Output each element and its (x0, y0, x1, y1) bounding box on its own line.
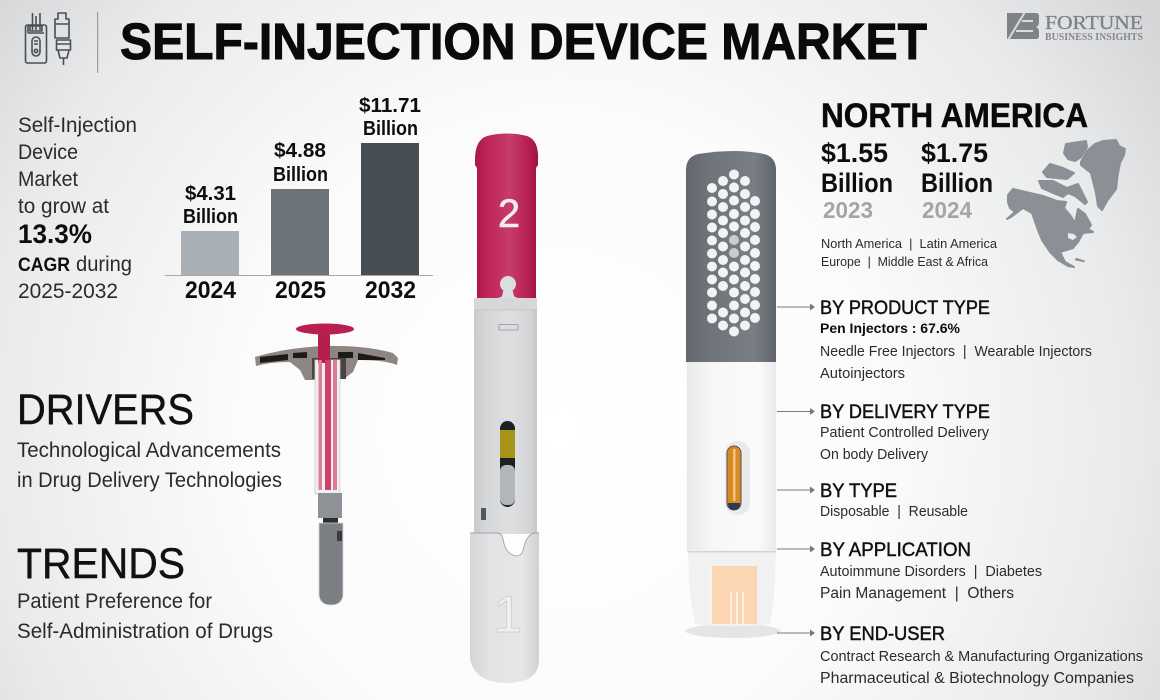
segment: by type: Disposable | Reusable (820, 504, 968, 520)
text block: trends (17, 540, 273, 643)
logo: Fortune Business Insights: BUSINESS INSIGHTS (1045, 32, 1143, 43)
segment: by end-user: Contract Research & Manufacturing Organizations (820, 649, 1143, 665)
bar chart: market size (165, 95, 433, 304)
text block: market growth summary: Market (18, 168, 78, 191)
text block: trends: Self-Administration of Drugs (17, 620, 273, 643)
stat: 2024 value: Billion (921, 168, 993, 198)
segment: by delivery type: On body Delivery (820, 447, 929, 463)
text block: market growth summary: Self-Injection (18, 114, 137, 137)
segment: by end-user: BY END-USER (820, 624, 945, 645)
bar: 2025 (271, 140, 329, 304)
segment: by application: BY APPLICATION (820, 540, 971, 561)
stat: 2024 value: $1.75 (921, 138, 988, 168)
text block: region list (821, 237, 997, 269)
illustration: red and grey autoinjector pen: 2 (498, 192, 520, 236)
arrow: delivery type (777, 408, 815, 415)
text block: market growth summary: CAGR (18, 255, 70, 276)
text block: region list: North America | Latin America (821, 237, 997, 251)
stat: 2024 value: 2024 (922, 197, 972, 223)
arrow: product type (777, 304, 815, 310)
stat: 2023 value: Billion (821, 168, 893, 198)
text block: market growth summary (18, 114, 137, 303)
segment: by delivery type (820, 402, 990, 463)
bar: 2024: $4.31 (185, 183, 236, 205)
segment: by type (820, 481, 968, 520)
text block: trends: TRENDS (17, 540, 185, 588)
illustration: red and grey autoinjector pen: 1 (494, 586, 522, 644)
bar: 2024 (181, 183, 239, 304)
text block: market growth summary: to grow at (18, 195, 109, 218)
text block: trends: Patient Preference for (17, 590, 212, 613)
stat: 2023 value: $1.55 (821, 138, 888, 168)
arrow: end-user (777, 630, 815, 636)
text block: market growth summary: 13.3% (18, 219, 92, 249)
bar: 2024: 2024 (185, 277, 237, 304)
stat: 2024 value (921, 138, 993, 223)
segment: by application (820, 540, 1042, 602)
icon: injection devices (26, 13, 70, 65)
heading: North America: NORTH AMERICA (821, 97, 1088, 135)
window: perforated grille (707, 170, 760, 336)
text block: market growth summary: Device (18, 141, 78, 164)
segment: by delivery type: BY DELIVERY TYPE (820, 402, 990, 423)
segment: by application: Pain Management | Others (820, 585, 1014, 602)
map: North America (1007, 140, 1125, 267)
logo: Fortune Business Insights (1007, 12, 1143, 43)
segment: by product type: BY PRODUCT TYPE (820, 298, 990, 319)
bar: 2025: 2025 (275, 277, 326, 304)
title: SELF-INJECTION DEVICE MARKET (120, 13, 927, 70)
segment: by end-user (820, 624, 1143, 687)
segment: by product type: Needle Free Injectors | Wearable Injectors (820, 344, 1092, 360)
bar: 2032: $11.71 (359, 95, 421, 117)
bar: 2032: Billion (363, 118, 418, 140)
bar: 2024: Billion (183, 206, 238, 228)
segment: by application: Autoimmune Disorders | Diabetes (820, 564, 1042, 580)
text block: drivers (17, 386, 282, 492)
segment: by product type (820, 298, 1092, 382)
segment: by type: BY TYPE (820, 481, 897, 502)
text block: drivers: DRIVERS (17, 386, 194, 434)
segment: by product type: Pen Injectors : 67.6% (820, 321, 960, 336)
illustration: red and grey autoinjector pen (470, 134, 539, 683)
logo: Fortune Business Insights: FORTUNE (1045, 12, 1143, 34)
bar: 2032 (359, 95, 421, 304)
text block: drivers: in Drug Delivery Technologies (17, 469, 282, 492)
arrow: application (777, 546, 815, 552)
text block: drivers: Technological Advancements (17, 439, 281, 462)
bar: 2025: Billion (273, 164, 328, 186)
text block: market growth summary: during (76, 253, 132, 276)
bar: 2032: 2032 (365, 277, 416, 304)
segment: by end-user: Pharmaceutical & Biotechnology Companies (820, 670, 1134, 687)
text block: region list: Europe | Middle East & Africa (821, 255, 988, 269)
divider (97, 12, 98, 73)
illustration: prefilled syringe (255, 324, 398, 605)
segment: by product type: Autoinjectors (820, 366, 905, 382)
segment: by delivery type: Patient Controlled Delivery (820, 425, 990, 441)
arrow: type (777, 486, 815, 494)
stat: 2023 value: 2023 (823, 197, 873, 223)
text block: market growth summary: 2025-2032 (18, 280, 118, 303)
stat: 2023 value (821, 138, 893, 223)
bar: 2025: $4.88 (274, 140, 326, 162)
illustration: white and grey injector device (686, 151, 780, 638)
